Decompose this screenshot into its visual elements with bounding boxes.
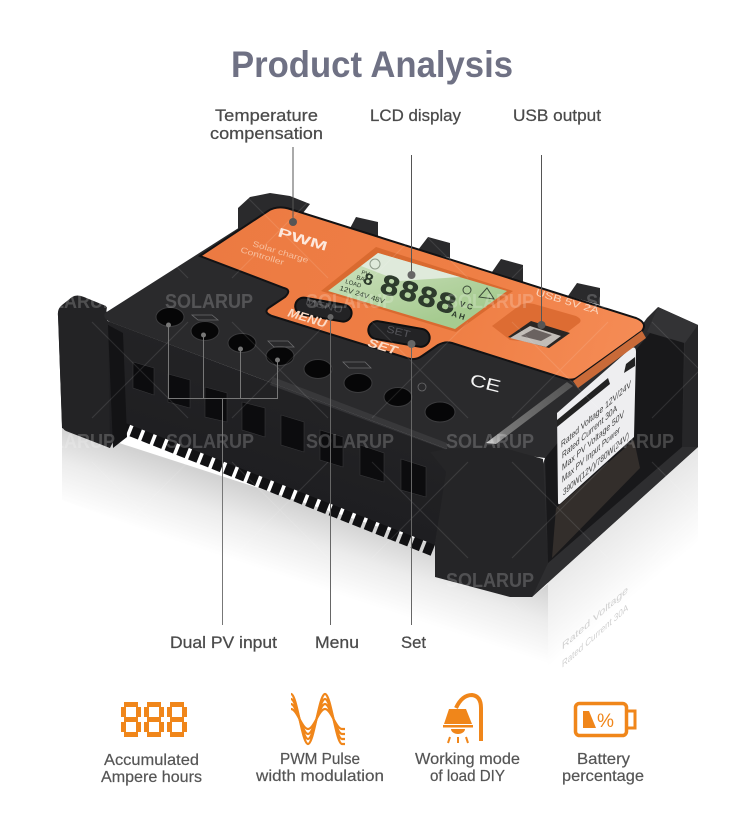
callout: set: Set	[401, 633, 426, 652]
SET button: SET	[366, 335, 401, 358]
rating label	[557, 348, 636, 504]
front lip highlight	[270, 377, 447, 450]
callout: menu	[315, 314, 359, 652]
silver edge strip	[486, 382, 573, 444]
feature: accumulated ampere hours	[101, 704, 202, 786]
cooling fins	[120, 426, 435, 551]
feature: accumulated ampere hours: Ampere hours	[101, 769, 202, 786]
plate text: solar charge controller	[239, 239, 310, 267]
SOLARUP watermarks: SOLARUP	[586, 431, 674, 453]
CE mark: CE	[468, 370, 503, 396]
right front block	[430, 446, 548, 597]
side wall beside top face	[480, 333, 650, 458]
callout: menu: Menu	[315, 633, 359, 652]
SOLARUP watermarks: SOLARUP	[446, 431, 534, 453]
feature: battery percentage: percentage	[562, 768, 644, 785]
feature: battery percentage: Battery	[577, 751, 630, 768]
MENU button: MENU	[286, 305, 329, 331]
terminal markings	[192, 315, 426, 391]
SOLARUP watermarks: SOLARUP	[306, 431, 394, 453]
SOLARUP watermarks: SOLARUP	[446, 570, 534, 592]
callout: dual PV input	[166, 322, 280, 652]
plate text: USB rating: USB 5V 2A	[534, 287, 601, 317]
feature: PWM pulse width modulation: width modulation	[255, 768, 384, 785]
icon: seven-segment digits	[124, 704, 184, 734]
rating label: Rated Current 30A	[562, 403, 617, 462]
SET button: SET	[385, 324, 411, 341]
icon: pulse waves	[291, 694, 345, 744]
front face	[58, 296, 447, 545]
left end block	[58, 296, 127, 448]
callout: temperature compensation	[210, 106, 323, 226]
LCD display: V C	[458, 299, 474, 312]
LCD display: A H	[450, 309, 466, 322]
rating label: Max PV Input Power	[562, 424, 620, 486]
feature: battery percentage	[562, 704, 644, 785]
orange top plate	[200, 207, 646, 388]
feature: working mode of load DIY: Working mode	[415, 751, 520, 768]
LCD display: BAT	[355, 275, 368, 284]
callout: LCD display: LCD display	[370, 106, 461, 125]
floor reflection: Rated Voltage	[562, 583, 628, 653]
rear terminal tabs	[238, 193, 600, 305]
callout: USB output	[513, 106, 601, 329]
SOLARUP watermarks	[27, 291, 674, 592]
title: Product Analysis	[231, 44, 513, 85]
callout: LCD display	[370, 106, 461, 279]
plate text: solar charge controller: Controller	[239, 245, 285, 267]
LCD display: LOAD	[344, 279, 362, 290]
MENU button: MENU	[305, 296, 344, 315]
SOLARUP watermarks: SOLARUP	[446, 291, 534, 313]
LCD display: 12V 24V 48V	[338, 285, 386, 306]
feature: accumulated ampere hours: Accumulated	[104, 752, 199, 769]
product photo: solar charge controller	[27, 190, 710, 700]
plate text: PWM: PWM	[276, 225, 329, 254]
LCD display: 8	[360, 271, 376, 292]
feature: PWM pulse width modulation	[255, 694, 384, 785]
SOLARUP watermarks: SOLARUP	[166, 431, 254, 453]
floor reflection	[62, 428, 698, 700]
rating label: 390W(12V)/780W(24V)	[563, 430, 629, 499]
side cavity	[545, 333, 684, 563]
MENU button	[286, 296, 353, 331]
icon: battery: %	[597, 711, 614, 732]
SOLARUP watermarks: SOLARUP	[306, 291, 394, 313]
right block and side face	[500, 307, 698, 597]
callout: temperature compensation: compensation	[210, 124, 323, 143]
callout: set	[401, 340, 426, 652]
floor reflection: Rated Current 30A	[562, 601, 628, 671]
LCD display: PV	[360, 270, 370, 278]
USB port	[492, 303, 581, 348]
SET button	[366, 320, 431, 358]
feature: PWM pulse width modulation: PWM Pulse	[280, 751, 360, 768]
LCD display: 8888	[375, 269, 460, 323]
top face	[104, 208, 575, 451]
watermark lattice	[40, 190, 710, 610]
SOLARUP watermarks: SOLARUP	[586, 291, 674, 313]
plate text: solar charge controller: Solar charge	[251, 239, 310, 265]
feature: working mode of load DIY	[415, 695, 520, 785]
ventilation windows	[133, 362, 426, 497]
feature: working mode of load DIY: of load DIY	[430, 768, 505, 785]
SOLARUP watermarks: SOLARUP	[27, 291, 115, 313]
rating label: Max PV Voltage 50V	[562, 409, 624, 474]
SOLARUP watermarks: SOLARUP	[27, 431, 115, 453]
icon: lamp	[443, 695, 481, 743]
cavity label reflection	[552, 440, 640, 558]
callout: dual PV input: Dual PV input	[170, 633, 277, 652]
LCD display	[321, 247, 513, 332]
SOLARUP watermarks: SOLARUP	[165, 291, 253, 313]
callout: temperature compensation: Temperature	[215, 106, 318, 125]
terminal holes	[156, 308, 455, 422]
callout: USB output: USB output	[513, 106, 601, 125]
rating label: Rated Voltage 12V/24V	[561, 378, 631, 451]
